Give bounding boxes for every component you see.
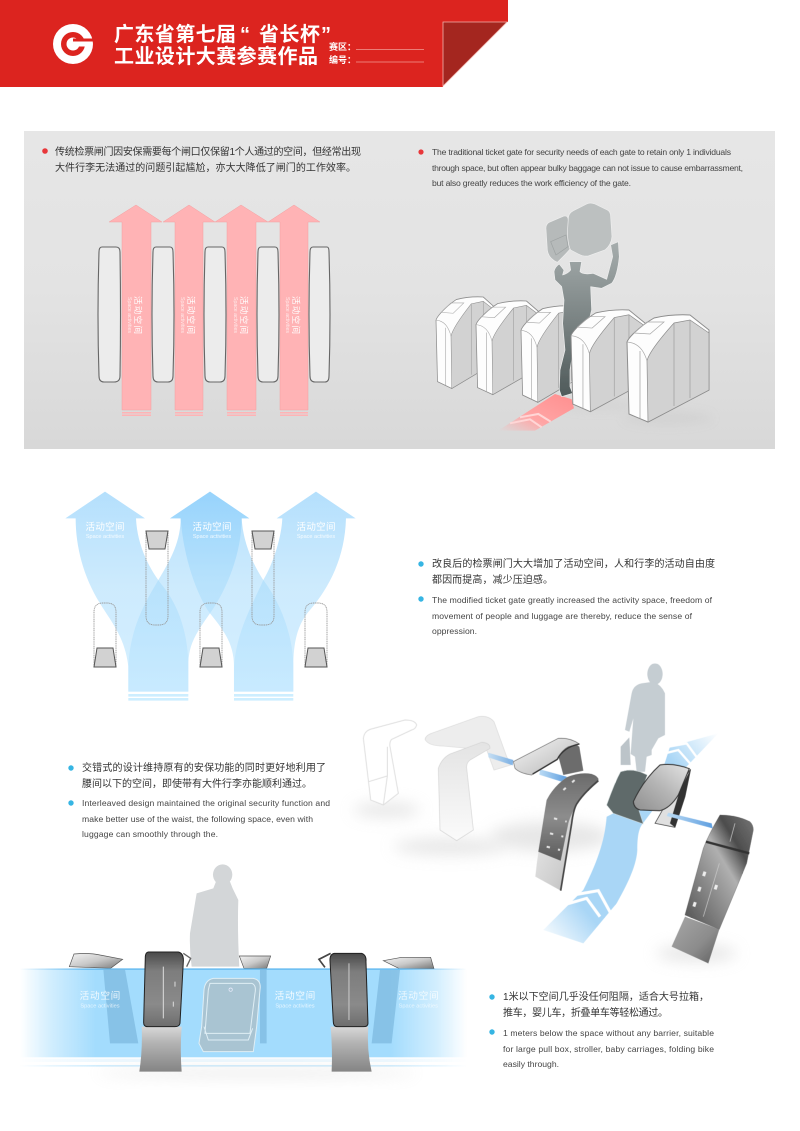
space labels: 活动空间: [275, 990, 315, 1002]
text block: English problem statement: through space, but often appear bulky baggage can not issue to cause embarrassment,: [432, 163, 743, 173]
contest title: 省长杯: [259, 23, 320, 46]
text block: improved gate: movement of people and luggage are thereby, reduce the sense of: [432, 611, 693, 621]
foreground gate: [672, 815, 753, 963]
header banner: [0, 0, 508, 87]
text block: staggered design: 腰间以下的空间，即使带有大件行李亦能顺利通过。: [82, 777, 312, 790]
text block: staggered design: 交错式的设计维持原有的安保功能的同时更好地利用了: [82, 761, 326, 774]
contest title: 广东省第七届: [114, 22, 236, 46]
illustration: front view with space band: [20, 864, 467, 1077]
rotated arrow labels: [126, 296, 301, 334]
space labels: Space activities: [80, 1003, 120, 1009]
ghost gate outline: [363, 720, 417, 805]
rotated arrow labels: 活动空间: [133, 296, 143, 334]
illustration: person lifting suitcase over gates: [436, 203, 713, 431]
suitcase and pedestrian: [607, 663, 665, 824]
mid gate: [513, 738, 583, 775]
space band: [20, 968, 467, 1067]
text block: Chinese problem statement: 大件行李无法通过的问题引起尴尬，亦大大降低了闸门的工作效率。: [55, 161, 356, 174]
arrow labels: Space activities: [297, 534, 335, 540]
text block: staggered design: Interleaved design maintained the original security function and: [82, 798, 330, 808]
text block: English problem statement: [418, 147, 743, 188]
text block: improved gate: [418, 557, 715, 636]
text block: barrier-free space: 1 meters below the space without any barrier, suitable: [503, 1028, 714, 1038]
pedestrian: [190, 864, 239, 967]
gate pills: [98, 247, 330, 382]
text block: improved gate: 都因而提高，减少压迫感。: [432, 573, 553, 586]
space labels: Space activities: [399, 1003, 438, 1009]
text block: barrier-free space: 1米以下空间几乎没任何阻隔，适合大号拉箱，: [503, 990, 709, 1003]
illustration: 3D view of staggered gates: [353, 663, 753, 963]
space labels: 活动空间: [80, 990, 120, 1002]
diagram: staggered gate plan view: [65, 492, 356, 701]
entry fields: 赛区：: [329, 41, 356, 52]
contest title: 工业设计大赛参赛作品: [114, 44, 318, 68]
entry fields: 编号：: [329, 54, 356, 65]
text block: improved gate: 改良后的检票闸门大大增加了活动空间，人和行李的活动自由度: [432, 557, 715, 570]
arrow labels: Space activities: [86, 534, 124, 540]
rotated arrow labels: Space activities: [179, 297, 185, 333]
text block: staggered design: [68, 761, 330, 839]
contest title: “: [240, 24, 250, 46]
rear gate stands: [103, 969, 400, 1043]
contest title: ”: [321, 24, 331, 46]
rotated arrow labels: 活动空间: [239, 296, 249, 334]
text block: improved gate: oppression.: [432, 626, 477, 636]
entry fields: [329, 41, 424, 65]
text block: barrier-free space: easily through.: [503, 1059, 559, 1069]
arrow labels: Space activities: [193, 534, 231, 540]
contest title: [114, 22, 331, 68]
rotated arrow labels: 活动空间: [291, 296, 301, 334]
text block: English problem statement: The traditional ticket gate for security needs of each gate to retain only 1 individuals: [432, 147, 731, 157]
text block: English problem statement: but also greatly reduces the work efficiency of the gate.: [432, 178, 631, 188]
arrow labels: [86, 521, 336, 540]
red floor path: [498, 394, 574, 431]
rotated arrow labels: 活动空间: [186, 296, 196, 334]
front gate right: [319, 953, 372, 1072]
blue passage path: [543, 733, 718, 943]
arrow labels: 活动空间: [86, 521, 124, 533]
gates back row: [436, 297, 498, 388]
floor shadows: [353, 803, 737, 962]
text block: improved gate: The modified ticket gate greatly increased the activity space, freedom of: [432, 595, 713, 605]
diagram: narrow gate plan view: [98, 205, 330, 416]
pale gate pair: [425, 716, 511, 841]
text block: staggered design: luggage can smoothly through the.: [82, 829, 218, 839]
text block: Chinese problem statement: 传统检票闸门因安保需要每个闸口仅保留1个人通过的空间，但经常出现: [55, 145, 361, 158]
gates: [94, 531, 327, 667]
text block: barrier-free space: for large pull box, stroller, baby carriages, folding bike: [503, 1044, 714, 1054]
front gate left: [139, 952, 191, 1072]
text block: Chinese problem statement: [42, 145, 361, 174]
floor shadow: [97, 1069, 417, 1077]
red arrows: [109, 205, 320, 416]
gate beside suitcase: [633, 764, 713, 828]
space labels: Space activities: [275, 1003, 315, 1009]
arrow labels: 活动空间: [296, 521, 336, 533]
text block: barrier-free space: 推车，婴儿车，折叠单车等轻松通过。: [503, 1006, 668, 1019]
rotated arrow labels: Space activities: [284, 297, 290, 333]
suitcase: [199, 978, 260, 1052]
arrow labels: 活动空间: [192, 521, 232, 533]
rear gate heads: [69, 954, 434, 969]
panel: traditional gate problem: [24, 131, 775, 449]
light beams: [488, 753, 567, 783]
space labels: [80, 990, 439, 1009]
text block: barrier-free space: [489, 990, 714, 1069]
folded corner: [443, 22, 507, 86]
blue flow arrows: [65, 492, 356, 701]
gates front row: [571, 310, 646, 412]
silver gate with screen: [535, 773, 598, 891]
person and lifted suitcase: [546, 203, 619, 397]
rotated arrow labels: Space activities: [232, 297, 238, 333]
rotated arrow labels: Space activities: [126, 297, 132, 333]
space labels: 活动空间: [398, 990, 439, 1002]
text block: staggered design: make better use of the waist, the following space, even with: [82, 814, 313, 824]
logo: [53, 24, 94, 64]
